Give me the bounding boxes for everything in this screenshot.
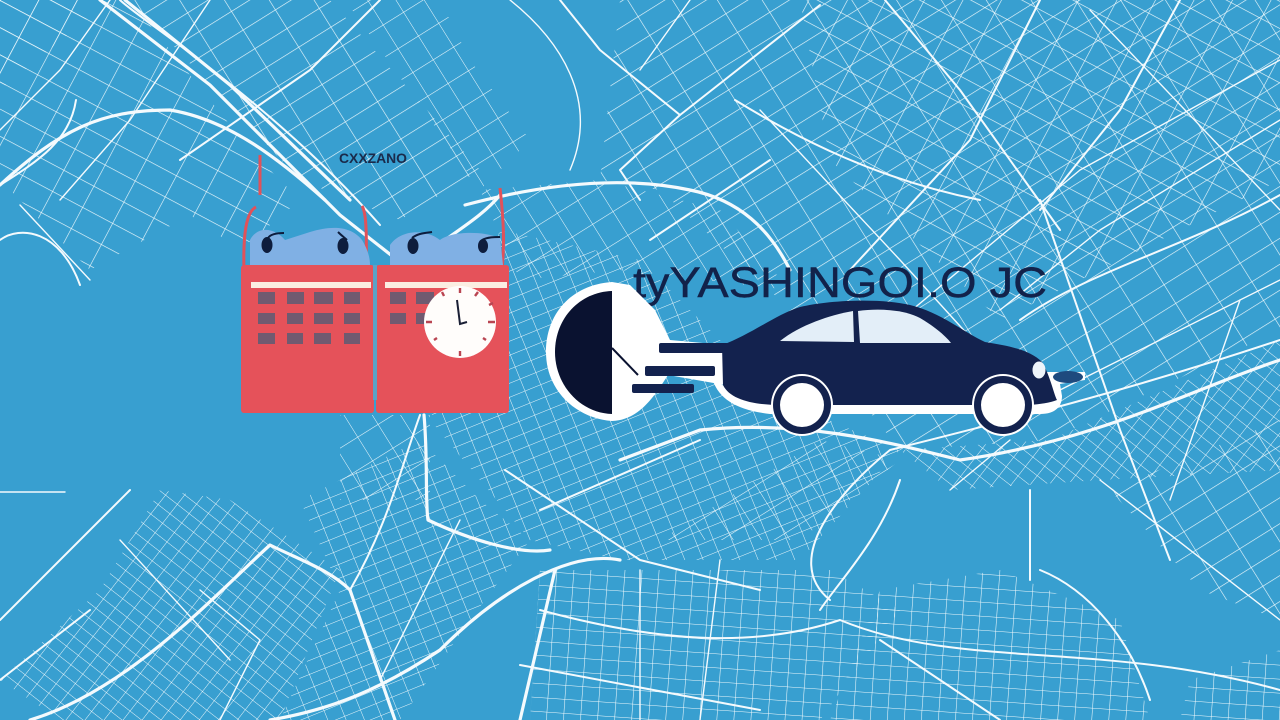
icon: calendar with clock <box>241 155 509 413</box>
car white outline base <box>712 372 1085 414</box>
car rear light <box>1053 371 1083 383</box>
small garbled label above calendar: CXXZANO <box>339 150 407 166</box>
plug head <box>546 282 725 421</box>
car windows <box>780 310 951 343</box>
car wheels <box>771 374 1034 436</box>
calendar binding tabs <box>244 155 503 270</box>
car body <box>722 301 1057 405</box>
calendar left page <box>241 265 374 413</box>
icon: car with plug <box>546 282 1085 436</box>
icon: clock <box>424 286 496 358</box>
title text: garbled city name: tyYASHINGOI.O JC <box>633 259 1047 307</box>
calendar header strips <box>251 282 507 288</box>
plug prongs <box>632 343 729 393</box>
calendar date grid <box>258 292 434 344</box>
calendar right page <box>376 265 509 413</box>
